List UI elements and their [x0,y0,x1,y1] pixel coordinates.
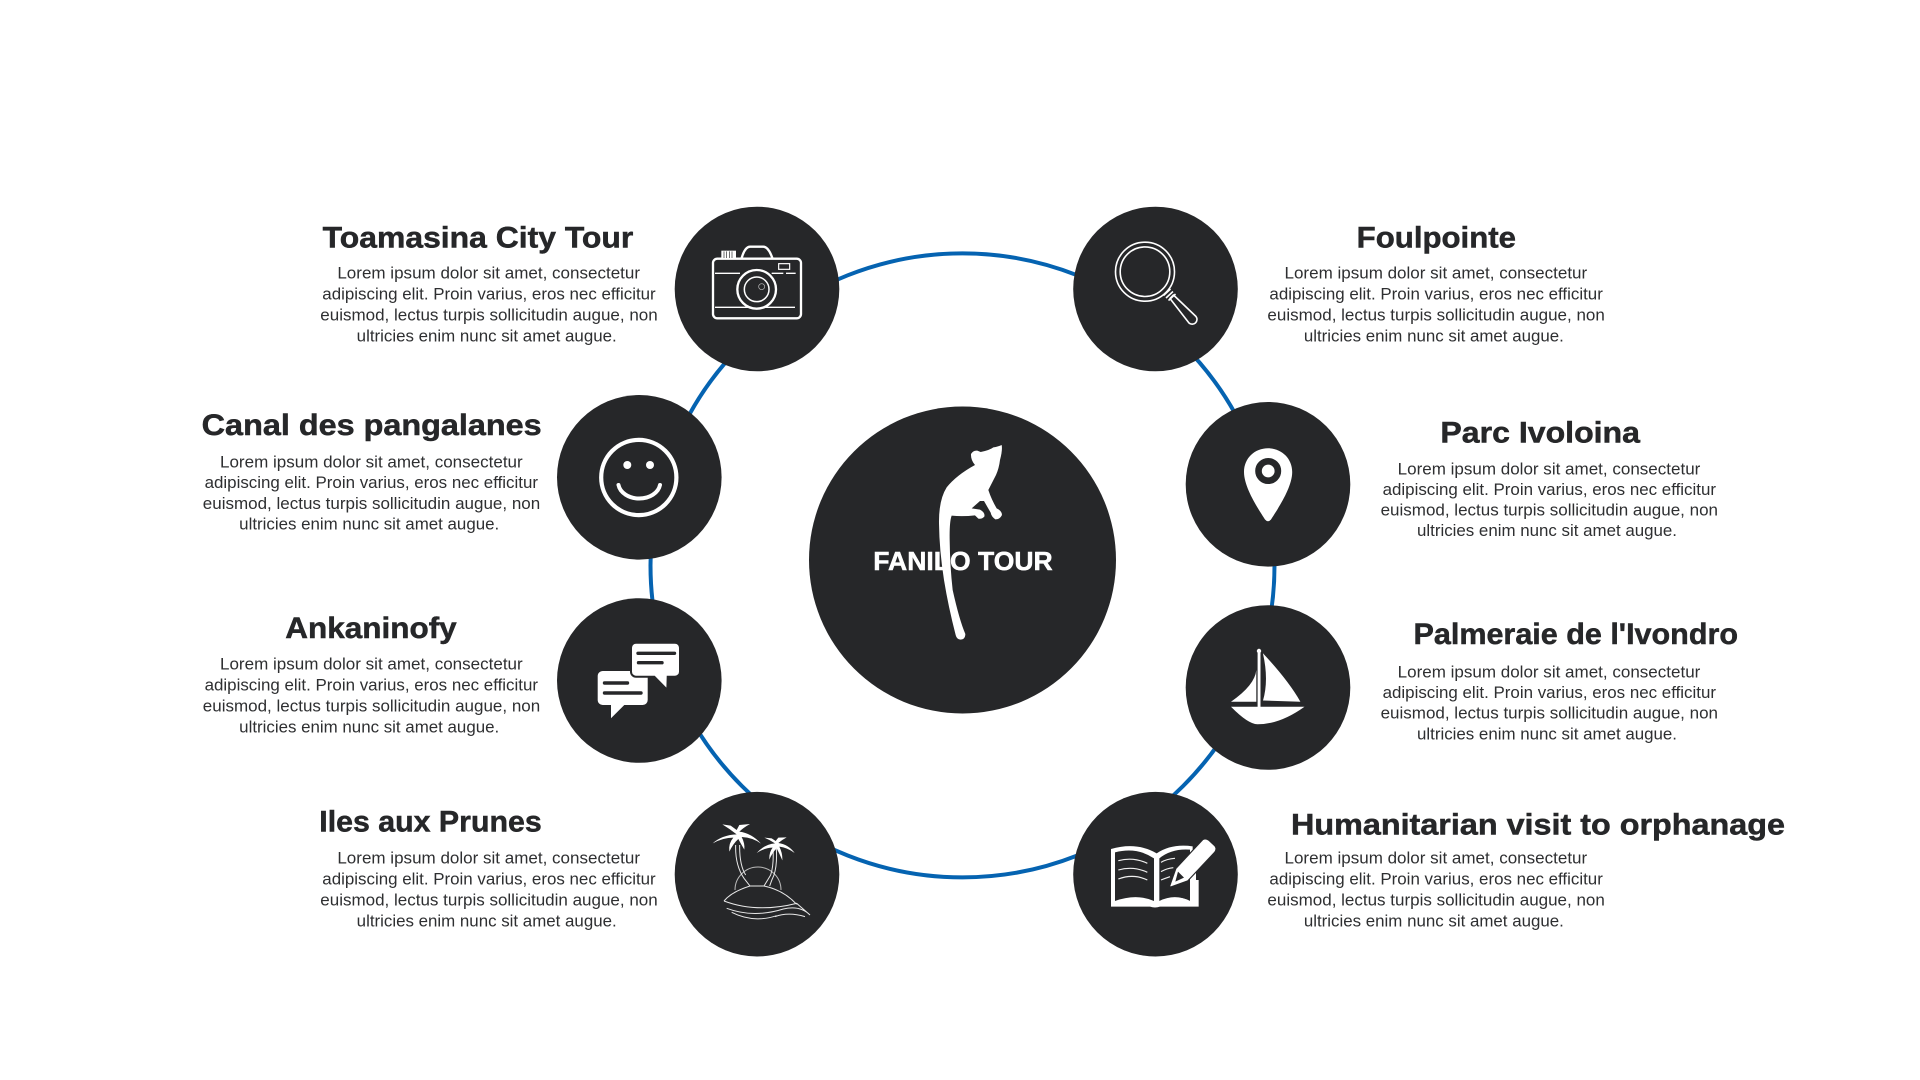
heading: Toamasina City Tour [323,221,634,254]
heading: Foulpointe [1357,221,1516,254]
heading: Ankaninofy [285,612,457,645]
description: ultricies enim nunc sit amet augue. [1304,326,1564,345]
description: ultricies enim nunc sit amet augue. [1417,521,1677,540]
description: Lorem ipsum dolor sit amet, consectetur [337,848,640,867]
panel: Ankaninofy [203,598,722,763]
panel: Humanitarian visit to orphanage [1073,792,1785,956]
panel: Iles aux Prunes [319,792,839,956]
panel: Palmeraie de l'Ivondro [1186,605,1738,770]
description [203,654,540,736]
icon: smiley [601,440,676,515]
description: euismod, lectus turpis sollicitudin augue, non [203,696,540,715]
hub title: FANILO TOUR [873,546,1053,576]
description: adipiscing elit. Proin varius, eros nec efficitur [322,869,656,888]
heading: Canal des pangalanes [202,409,542,442]
node circle [1186,402,1350,567]
icon: chat bubbles [598,643,680,718]
heading: Palmeraie de l'Ivondro [1414,618,1738,651]
panel: Toamasina City Tour [320,207,839,371]
icon: palm island [713,824,810,919]
heading: Iles aux Prunes [319,806,542,839]
description [1267,263,1605,345]
connecting blue ring [650,253,1274,877]
icon: map pin [1244,448,1292,521]
description: Lorem ipsum dolor sit amet, consectetur [1284,263,1588,282]
description [320,263,658,345]
description: euismod, lectus turpis sollicitudin augue, non [1267,305,1605,324]
node circle [1186,605,1350,770]
description: ultricies enim nunc sit amet augue. [1417,724,1677,743]
node circle [675,207,839,371]
icon: magnifying glass [1116,242,1197,324]
description: adipiscing elit. Proin varius, eros nec efficitur [1383,683,1716,702]
description: ultricies enim nunc sit amet augue. [357,326,617,345]
node circle [675,792,839,956]
description: ultricies enim nunc sit amet augue. [1304,911,1564,930]
heading: Parc Ivoloina [1440,416,1640,449]
description: euismod, lectus turpis sollicitudin augue, non [1267,890,1605,909]
description: adipiscing elit. Proin varius, eros nec efficitur [322,284,656,303]
description: Lorem ipsum dolor sit amet, consectetur [1398,459,1701,478]
description: adipiscing elit. Proin varius, eros nec efficitur [1269,869,1603,888]
panel: Parc Ivoloina [1186,402,1718,567]
description: Lorem ipsum dolor sit amet, consectetur [1398,662,1701,681]
description: adipiscing elit. Proin varius, eros nec efficitur [205,473,538,492]
description: adipiscing elit. Proin varius, eros nec efficitur [205,675,538,694]
description [320,848,658,930]
description: Lorem ipsum dolor sit amet, consectetur [337,263,640,282]
description: ultricies enim nunc sit amet augue. [239,717,499,736]
node circle [557,395,722,560]
description: Lorem ipsum dolor sit amet, consectetur [220,654,523,673]
description: Lorem ipsum dolor sit amet, consectetur [220,452,523,471]
icon: sailboat [1231,649,1304,724]
description [1381,459,1718,540]
panel: Canal des pangalanes [202,395,722,560]
node circle [1073,792,1238,956]
node circle [1073,207,1238,371]
description: Lorem ipsum dolor sit amet, consectetur [1284,848,1588,867]
description: euismod, lectus turpis sollicitudin augue, non [1381,500,1718,520]
description: euismod, lectus turpis sollicitudin augue, non [1381,704,1718,723]
central hub: Fanilo Tour [809,406,1116,714]
description: adipiscing elit. Proin varius, eros nec efficitur [1383,480,1716,499]
icon: camera [713,247,801,318]
icon: lemur silhouette [939,445,1002,640]
description [203,452,540,534]
description: euismod, lectus turpis sollicitudin augue, non [320,890,658,909]
node circle [557,598,722,763]
description: ultricies enim nunc sit amet augue. [239,515,499,534]
description: euismod, lectus turpis sollicitudin augue, non [203,494,540,513]
description: euismod, lectus turpis sollicitudin augue, non [320,305,658,324]
heading: Humanitarian visit to orphanage [1291,808,1785,841]
panel: Foulpointe [1073,207,1605,371]
description [1267,848,1605,930]
icon: open book and pencil [1111,840,1215,907]
description [1381,662,1718,743]
description: ultricies enim nunc sit amet augue. [357,911,617,930]
description: adipiscing elit. Proin varius, eros nec efficitur [1269,284,1603,303]
